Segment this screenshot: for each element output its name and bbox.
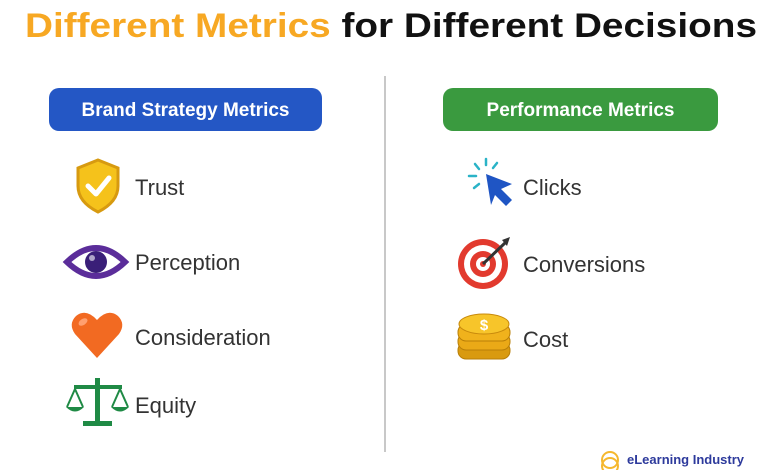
panel: brand strategy (49, 88, 322, 426)
item: trust: Trust (135, 175, 184, 200)
item: clicks (469, 159, 582, 206)
item: equity (66, 378, 196, 426)
panel: performance (443, 88, 718, 359)
heading: Performance Metrics: Performance Metrics (487, 100, 674, 121)
heading: Brand Strategy Metrics: Brand Strategy Metrics (81, 100, 290, 121)
item: perception (67, 248, 240, 276)
item: conversions: Conversions (523, 252, 645, 277)
title: Different Metrics for Different Decisions (25, 7, 757, 45)
item: consideration: Consideration (135, 325, 271, 350)
item: cost (458, 314, 568, 359)
item: clicks: Clicks (523, 175, 582, 200)
heading: Brand Strategy Metrics (49, 88, 322, 131)
item: trust (78, 160, 184, 212)
item: perception: Perception (135, 250, 240, 275)
heading: Performance Metrics (443, 88, 718, 131)
item: cost: $ (480, 317, 489, 334)
logo: eLearning Industry: eLearning Industry (627, 452, 745, 467)
logo: eLearning Industry (602, 452, 745, 470)
item: consideration (72, 313, 271, 358)
item: conversions (458, 237, 645, 289)
item: equity: Equity (135, 393, 196, 418)
item: cost: Cost (523, 327, 568, 352)
